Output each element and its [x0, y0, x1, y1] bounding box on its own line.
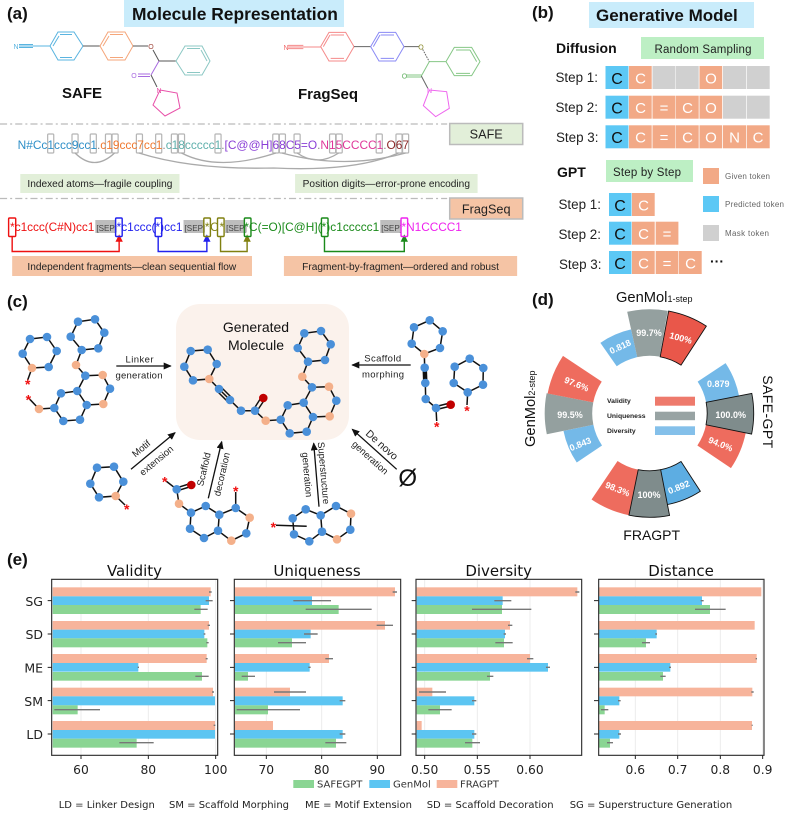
wedge value labels: 100% [637, 490, 661, 500]
generated molecule graph [180, 327, 341, 438]
validity category labels: LD [26, 727, 43, 742]
label: scaffold decoration [195, 452, 233, 497]
chart: distance [594, 562, 772, 777]
diffusion step rows: C [635, 100, 646, 117]
SAFE molecule atoms [13, 44, 162, 95]
panel b heading [589, 2, 754, 28]
wedge value labels: 99.7% [636, 328, 662, 338]
wedge legend: Validity [607, 398, 631, 405]
GPT step rows: Step 1: [558, 197, 601, 212]
callout: fragment by fragment [284, 256, 517, 276]
abbreviation footnote: SD = Scaffold Decoration [427, 800, 554, 811]
diffusion step rows: Step 1: [556, 70, 598, 85]
SAFE coupling arcs [75, 153, 406, 169]
arrow: linker generation [116, 365, 171, 367]
arrow: scaffold decoration [208, 442, 222, 498]
wedge value labels: 0.892 [667, 478, 691, 496]
SEP tokens: [SEP] [226, 224, 247, 233]
callout: indexed atoms: Indexed atoms—fragile coupling [27, 179, 172, 190]
divider SAFE [0, 123, 447, 125]
FragSeq string: *c1ccc(*)cc1 [117, 221, 183, 234]
superstructure input [271, 502, 355, 546]
diffusion step rows: Step 3: [556, 130, 598, 145]
FragSeq tag [450, 198, 523, 219]
SAFE molecule atoms: N [156, 88, 162, 95]
GPT heading: GPT [557, 164, 586, 180]
string representations block [0, 124, 523, 276]
label: scaffold morphing: Scaffold [364, 354, 401, 364]
chart: diversity [411, 562, 582, 777]
validity category labels: SM [24, 694, 43, 709]
arrow: motif extension [131, 433, 175, 469]
callout: position digits: Position digits—error-prone encoding [303, 179, 470, 190]
diffusion heading: Diffusion [556, 40, 617, 56]
label: GenMol 1-step: GenMol1-step [616, 290, 692, 306]
wedge value labels: 94.0% [707, 435, 734, 454]
GPT step rows: ··· [710, 253, 724, 269]
FragSeq molecule atoms [283, 44, 432, 95]
FragSeq string: *N1CCCC1 [402, 221, 462, 234]
label: scaffold decoration: Scaffold [195, 452, 214, 487]
panel d: radial metrics [523, 290, 776, 543]
SAFE tag: SAFE [470, 128, 503, 141]
abbreviation footnote: SM = Scaffold Morphing [169, 800, 289, 811]
wedge value labels: 97.6% [563, 375, 590, 394]
scaffold morphing input: * [434, 418, 440, 434]
uniqueness tick labels: 90 [369, 763, 385, 777]
GPT step rows: C [614, 226, 626, 244]
diffusion step rows: O [705, 70, 717, 88]
scaffold decoration input [162, 474, 254, 545]
wedge value labels: 0.879 [707, 379, 730, 389]
scaffold morphing input: * [464, 402, 470, 418]
chart: uniqueness [230, 562, 401, 777]
validity category labels: SD [25, 627, 43, 642]
abbreviation footnote [59, 800, 732, 811]
linker input fragments: * [25, 376, 31, 392]
label: motif extension: extension [138, 444, 176, 478]
GPT step rows: Step 2: [558, 227, 601, 242]
token legend: Predicted token [725, 200, 784, 209]
generated molecule heading: Molecule [228, 337, 284, 353]
diffusion step rows: C [682, 100, 693, 117]
panel c label: (c) [7, 292, 28, 311]
GPT step rows: = [663, 256, 672, 272]
panel a label: (a) [7, 4, 28, 23]
diversity tick labels [411, 763, 544, 777]
empty set symbol: Ø [398, 465, 417, 492]
abbreviation footnote: SG = Superstructure Generation [570, 800, 732, 811]
distance tick labels: 0.9 [753, 763, 772, 777]
token legend: Mask token [725, 229, 769, 238]
SEP tokens [95, 220, 402, 233]
uniqueness tick labels: 70 [258, 763, 274, 777]
FragSeq caption: FragSeq [298, 86, 358, 103]
label: superstructure generation: Superstructure [315, 442, 331, 505]
diffusion step rows: C [635, 70, 646, 88]
diffusion step rows: O [705, 130, 717, 146]
arrow: superstructure generation [314, 443, 319, 507]
distance title: Distance [648, 562, 714, 580]
label: GenMol 2-step: GenMol2-step [523, 371, 539, 447]
GPT step rows [558, 193, 724, 274]
GPT step rows: C [614, 256, 626, 273]
FragSeq string: *C* [205, 221, 225, 234]
wedge value labels: 98.3% [604, 480, 631, 499]
SEP tokens: [SEP] [185, 224, 205, 233]
diffusion step rows: C [611, 130, 623, 147]
distance tick labels: 0.7 [668, 763, 687, 777]
GenMol 2-step wedges [539, 354, 606, 463]
generated molecule box [176, 304, 349, 440]
FragSeq string: *C(=O)[C@H](*)c1ccccc1 [244, 221, 379, 234]
diffusion step rows: C [682, 130, 693, 146]
linker input fragments [18, 315, 114, 425]
label: de novo generation [349, 428, 400, 477]
random sampling tag: Random Sampling [654, 44, 752, 56]
divider FragSeq [0, 198, 447, 200]
label: scaffold decoration: decoration [212, 452, 233, 497]
panel d label: (d) [532, 290, 554, 309]
validity plot [48, 579, 218, 759]
FRAGPT wedges [590, 457, 700, 523]
validity tick labels: 100 [204, 763, 227, 777]
validity category labels [24, 594, 43, 742]
diffusion step rows [556, 66, 770, 148]
panel b label: (b) [532, 3, 554, 22]
FragSeq molecule atoms: N [427, 88, 432, 95]
validity category labels: ME [24, 660, 43, 676]
SEP tokens: [SEP] [96, 224, 117, 233]
chart legend: FRAGPT [460, 780, 500, 791]
wedge value labels: 100.0% [715, 410, 746, 420]
FragSeq molecule atoms: O [418, 44, 424, 52]
wedge legend: Diversity [607, 428, 636, 435]
label: scaffold morphing: morphing [362, 370, 404, 380]
SEP tokens: [SEP] [381, 224, 402, 233]
label: SAFE-GPT: SAFE-GPT [760, 375, 776, 449]
GPT step rows: C [638, 198, 649, 214]
FragSeq string: *c1ccc(C#N)cc1 [10, 221, 94, 234]
wedge legend: Uniqueness [607, 413, 646, 420]
motif input: * [124, 501, 130, 517]
diversity tick labels: 0.60 [516, 763, 544, 777]
scaffold morphing input [407, 316, 488, 434]
SAFE molecule atoms: O [148, 44, 154, 51]
diffusion step rows: O [705, 100, 717, 117]
diffusion step rows: N [729, 130, 740, 146]
diffusion step rows: C [753, 130, 764, 146]
label: motif extension: Motif [130, 438, 153, 460]
SAFE string: N#Cc1ccc9cc1.c19ccc7cc1.c18ccccc1.[C@@H]68C5=O.N15CCCC1.O67 [18, 138, 409, 152]
uniqueness plot [230, 579, 401, 759]
wedge value labels: 100% [668, 330, 693, 346]
FragSeq molecule atoms: N [283, 45, 289, 52]
label: FRAGPT: FRAGPT [623, 527, 681, 543]
label: superstructure generation: generation [299, 452, 314, 498]
diffusion step rows: C [611, 100, 623, 118]
motif input [86, 462, 130, 517]
fragment boxes and connectors [9, 218, 408, 252]
chart legend: GenMol [393, 780, 431, 791]
SAFE caption: SAFE [62, 85, 102, 102]
GPT step rows: = [663, 226, 672, 243]
distance plot [594, 579, 764, 759]
label: linker generation: Linker [126, 354, 154, 366]
wedge value labels [557, 328, 746, 500]
FragSeq molecule [288, 32, 480, 117]
panel a heading: Molecule Representation [132, 4, 338, 24]
diversity plot [412, 579, 582, 759]
GPT step rows: C [638, 256, 649, 272]
GPT step rows: Step 3: [559, 257, 601, 272]
FragSeq tag: FragSeq [462, 203, 511, 216]
diffusion step rows: C [635, 130, 646, 146]
validity tick labels: 80 [140, 763, 156, 777]
panel a: molecule representation [0, 0, 523, 276]
GPT step rows: C [638, 226, 649, 243]
GPT step rows: C [614, 198, 626, 215]
SAFE molecule atoms: N [13, 44, 19, 51]
FragSeq string [10, 221, 462, 234]
uniqueness title: Uniqueness [273, 562, 361, 580]
panel b heading: Generative Model [596, 6, 738, 25]
diversity tick labels: 0.50 [411, 763, 438, 777]
token legend: Given token [725, 172, 770, 181]
scaffold decoration input: * [162, 474, 168, 490]
abbreviation footnote: ME = Motif Extension [305, 800, 412, 811]
FragSeq molecule atoms: O [402, 74, 408, 80]
generated molecule heading [223, 319, 289, 353]
wedge legend [607, 397, 695, 435]
linker input fragments: * [26, 392, 32, 408]
step by step tag: Step by Step [613, 167, 681, 179]
chart: validity [24, 562, 227, 777]
diversity tick labels: 0.55 [464, 763, 491, 777]
GPT step rows: C [685, 256, 696, 272]
SAFE digit highlight boxes [48, 134, 409, 153]
uniqueness tick labels [258, 763, 385, 777]
token legend [703, 168, 784, 241]
superstructure input: * [271, 519, 277, 535]
panel a heading [124, 0, 344, 27]
SAFE tag [450, 124, 523, 144]
panel c: generation tasks [7, 292, 488, 546]
diffusion step rows: = [660, 100, 669, 117]
distance tick labels: 0.8 [711, 763, 730, 777]
chart legend: SAFEGPT [317, 780, 363, 791]
callout: indexed atoms [20, 174, 179, 193]
step by step tag [606, 160, 693, 182]
callout: independent fragments [12, 256, 252, 276]
SAFE molecule [19, 32, 210, 116]
diversity title: Diversity [465, 562, 532, 580]
validity category labels: SG [25, 594, 43, 609]
panel b: generative model [532, 2, 784, 274]
diffusion step rows: C [611, 71, 623, 88]
scaffold decoration input: * [233, 483, 239, 499]
wedge value labels: 0.843 [568, 435, 593, 453]
label: linker generation [116, 354, 162, 382]
panel e label: (e) [7, 550, 28, 569]
abbreviation footnote: LD = Linker Design [59, 800, 155, 811]
callout: fragment by fragment: Fragment-by-fragment—ordered and robust [302, 262, 499, 273]
diffusion step rows: Step 2: [556, 100, 598, 115]
validity title: Validity [107, 562, 162, 580]
arrow: scaffold morphing [352, 364, 411, 366]
wedge value labels: 99.5% [557, 410, 583, 420]
label: scaffold morphing [362, 354, 404, 380]
radial wedges [539, 303, 759, 523]
callout: independent fragments: Independent fragments—clean sequential flow [27, 262, 237, 273]
validity tick labels: 60 [73, 763, 89, 777]
label: de novo generation: generation [349, 439, 390, 477]
GenMol 1-step wedges [600, 303, 708, 370]
distance tick labels: 0.6 [626, 763, 645, 777]
label: superstructure generation [299, 442, 331, 505]
diffusion step rows: = [660, 130, 669, 146]
uniqueness tick labels: 80 [314, 763, 330, 777]
label: de novo generation: De novo [363, 428, 400, 463]
arrow: de novo generation [352, 429, 397, 469]
distance tick labels [626, 763, 772, 777]
SAFE-GPT wedges [694, 363, 759, 470]
generated molecule heading: Generated [223, 319, 289, 335]
label: linker generation: generation [116, 370, 162, 382]
random sampling tag [641, 37, 764, 59]
panel e: bar charts [7, 550, 772, 811]
chart legend [293, 780, 500, 791]
validity tick labels [73, 763, 227, 777]
wedge value labels: 0.818 [608, 337, 633, 356]
SAFE molecule atoms: O [131, 73, 137, 80]
callout: position digits [295, 174, 478, 193]
